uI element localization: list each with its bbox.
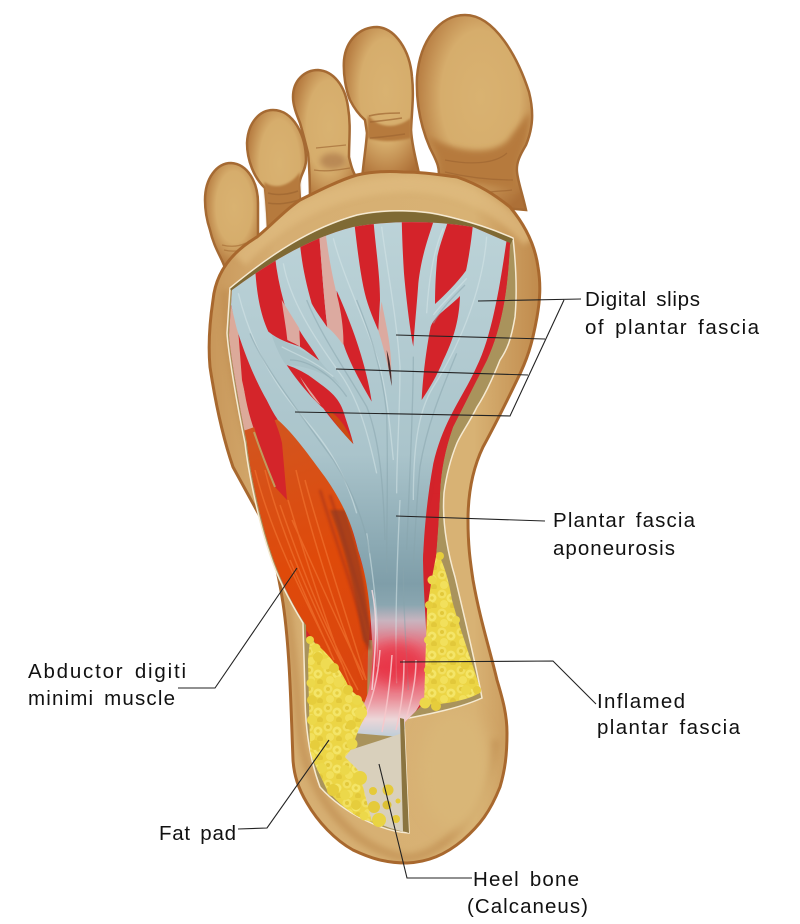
leader lines: digital slips [295,299,581,416]
base tissue [220,210,520,722]
fat globules on heel bone [353,771,400,827]
label: abductor digiti minimi muscle [28,568,297,710]
toe: third toe [293,70,358,205]
label: fat pad [159,740,329,845]
label: fat pad: Fat pad [159,822,236,845]
pink tissue strips [282,236,392,405]
olive shadow under top cut [230,212,513,292]
toe: fourth toe [247,110,306,238]
label: digital slips: Digital slips [585,288,700,311]
label: heel bone: Heel bone [473,868,579,891]
red gap shapes between digital slips [255,217,513,573]
label: digital slips [295,288,760,416]
label: abductor digiti minimi muscle: Abductor digiti [28,660,186,683]
label: inflamed plantar fascia [400,661,741,739]
plantar fascia [227,203,513,737]
dissection window edge [227,211,516,833]
foot illustration [205,15,540,863]
tan sliver beside red muscle [254,432,275,487]
heel flap shadow edge [400,718,409,833]
fibre highlights [238,227,487,683]
label: heel bone: (Calcaneus) [467,895,588,918]
inflamed fibres [363,590,416,732]
inflamed area [370,642,424,686]
heel bone [345,734,403,832]
label: inflamed plantar fascia: Inflamed [597,690,685,713]
label: heel bone [379,764,588,918]
label: abductor digiti minimi muscle: minimi muscle [28,687,175,710]
left red muscle [238,328,287,500]
cross slip between digits [272,336,320,366]
toe: second toe [344,27,420,180]
fibre shadows [250,285,465,690]
label: plantar fascia aponeurosis: aponeurosis [553,537,675,560]
toe: big toe [417,15,532,210]
sole of foot [209,171,540,863]
fat pad: right side [420,552,481,711]
label: digital slips: of plantar fascia [585,316,760,339]
label: plantar fascia aponeurosis: Plantar fascia [553,509,696,532]
fat pad: left side [306,636,372,822]
abductor digiti minimi muscle [240,415,372,705]
toe: little toe [205,163,258,268]
label: plantar fascia aponeurosis [396,509,696,560]
pink strip at left [229,306,254,442]
dissected anatomy [220,203,520,832]
label: inflamed plantar fascia: plantar fascia [597,716,741,739]
